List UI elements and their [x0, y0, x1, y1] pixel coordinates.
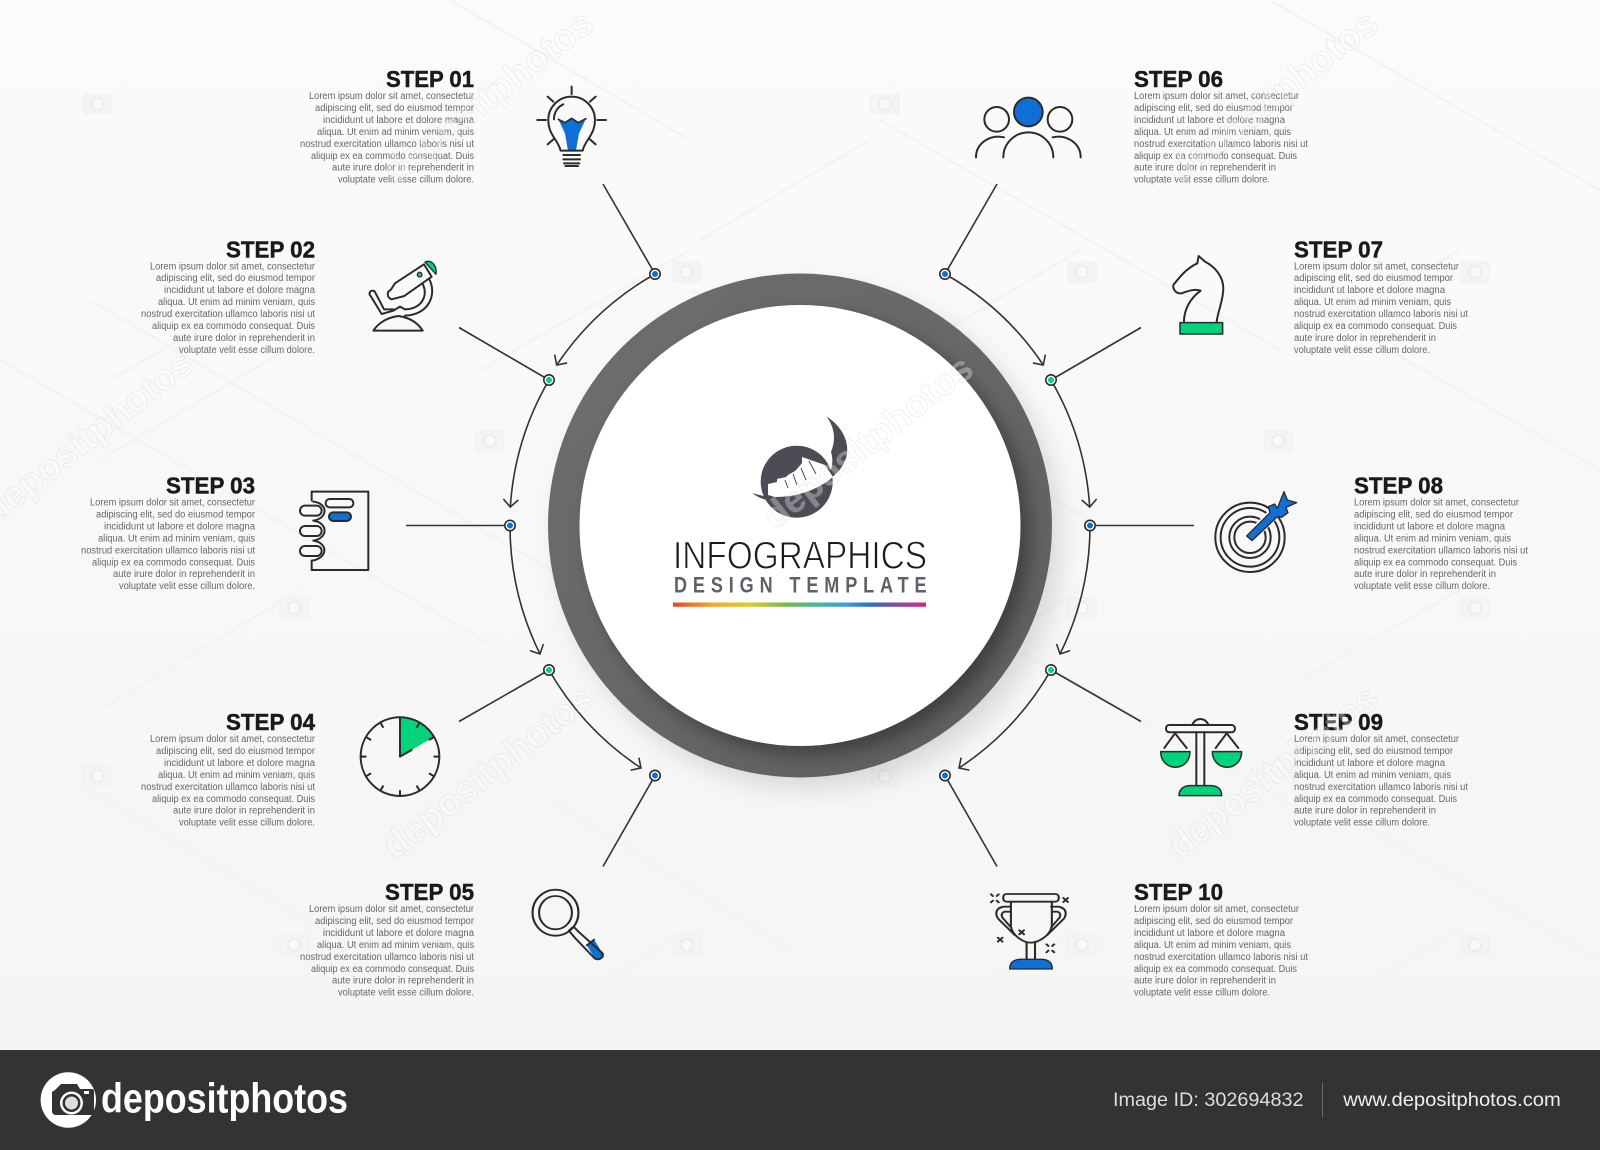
step 05 text: aliqua. Ut enim ad minim veniam, quis — [317, 940, 474, 951]
step 02 text: Lorem ipsum dolor sit amet, consectetur — [150, 261, 316, 272]
step 06 text: Lorem ipsum dolor sit amet, consectetur — [1134, 91, 1300, 102]
step 09 text: aliquip ex ea commodo consequat. Duis — [1294, 794, 1457, 805]
step 08 text: aute irure dolor in reprehenderit in — [1354, 569, 1496, 580]
step 05 text: voluptate velit esse cillum dolore. — [338, 988, 474, 999]
step 06 text: aliqua. Ut enim ad minim veniam, quis — [1134, 127, 1291, 138]
step 09 text: nostrud exercitation ullamco laboris nisi ut — [1294, 782, 1468, 793]
step 09 text: adipiscing elit, sed do eiusmod tempor — [1294, 746, 1454, 757]
step 01 text: aliqua. Ut enim ad minim veniam, quis — [317, 127, 474, 138]
curved arrows — [510, 274, 1090, 768]
step 03 text — [81, 472, 256, 592]
step 07 text: aliqua. Ut enim ad minim veniam, quis — [1294, 297, 1451, 308]
step 04 text: nostrud exercitation ullamco laboris nisi ut — [141, 782, 315, 793]
step 03 text: voluptate velit esse cillum dolore. — [119, 581, 255, 592]
step 10 text: voluptate velit esse cillum dolore. — [1134, 988, 1270, 999]
step 10 text: aute irure dolor in reprehenderit in — [1134, 976, 1276, 987]
watermark text: depositphotos — [1160, 2, 1386, 191]
step 09 text — [1294, 709, 1468, 829]
step 10 text: STEP 10 — [1134, 879, 1223, 905]
step 05 text: aute irure dolor in reprehenderit in — [332, 976, 474, 987]
footer bar — [0, 1050, 1600, 1150]
step 10 text: aliquip ex ea commodo consequat. Duis — [1134, 964, 1297, 975]
step 05 text: Lorem ipsum dolor sit amet, consectetur — [309, 904, 475, 915]
step 09 text: incididunt ut labore et dolore magna — [1294, 758, 1445, 769]
step 01 text: adipiscing elit, sed do eiusmod tempor — [315, 103, 475, 114]
step 01 text: STEP 01 — [386, 66, 474, 92]
step 01 text: incididunt ut labore et dolore magna — [323, 115, 474, 126]
icon: people group — [976, 98, 1081, 157]
watermark text — [0, 2, 1386, 866]
step 04 text: aliquip ex ea commodo consequat. Duis — [152, 794, 315, 805]
step 08 text: incididunt ut labore et dolore magna — [1354, 521, 1505, 532]
step 08 text: aliqua. Ut enim ad minim veniam, quis — [1354, 533, 1511, 544]
step 01 text: nostrud exercitation ullamco laboris nisi ut — [300, 139, 474, 150]
footer url: www.depositphotos.com — [1342, 1089, 1561, 1111]
step 06 text: voluptate velit esse cillum dolore. — [1134, 175, 1270, 186]
step 06 text: STEP 06 — [1134, 66, 1223, 92]
step 03 text: STEP 03 — [166, 472, 255, 498]
step 08 text — [1354, 472, 1528, 592]
step 01 text — [300, 66, 475, 186]
step 05 text — [300, 879, 475, 999]
step 10 text: nostrud exercitation ullamco laboris nisi ut — [1134, 952, 1308, 963]
step 06 text: incididunt ut labore et dolore magna — [1134, 115, 1285, 126]
step 03 text: aute irure dolor in reprehenderit in — [113, 569, 255, 580]
step 06 text: aliquip ex ea commodo consequat. Duis — [1134, 151, 1297, 162]
step 06 text: aute irure dolor in reprehenderit in — [1134, 163, 1276, 174]
step 01 text: aliquip ex ea commodo consequat. Duis — [311, 151, 474, 162]
step 07 text: aliquip ex ea commodo consequat. Duis — [1294, 321, 1457, 332]
watermark text: depositphotos — [755, 347, 981, 536]
step 05 text: incididunt ut labore et dolore magna — [323, 928, 474, 939]
step 04 text: STEP 04 — [226, 709, 315, 735]
step 03 text: aliquip ex ea commodo consequat. Duis — [92, 557, 255, 568]
step 02 text: aliquip ex ea commodo consequat. Duis — [152, 321, 315, 332]
subtitle: design template: DESIGN TEMPLATE — [674, 574, 927, 598]
central ring — [548, 274, 1052, 778]
step 10 text: Lorem ipsum dolor sit amet, consectetur — [1134, 904, 1300, 915]
step 07 text: Lorem ipsum dolor sit amet, consectetur — [1294, 261, 1460, 272]
icon: clock — [361, 717, 439, 796]
step 04 text: aliqua. Ut enim ad minim veniam, quis — [158, 770, 315, 781]
icon: microscope — [369, 261, 436, 331]
step 04 text: aute irure dolor in reprehenderit in — [173, 806, 315, 817]
step 08 text: STEP 08 — [1354, 472, 1443, 498]
step 02 text: adipiscing elit, sed do eiusmod tempor — [156, 273, 316, 284]
step 08 text: adipiscing elit, sed do eiusmod tempor — [1354, 509, 1514, 520]
step 08 text: nostrud exercitation ullamco laboris nisi ut — [1354, 545, 1528, 556]
step 07 text: incididunt ut labore et dolore magna — [1294, 285, 1445, 296]
watermark camera icons — [83, 94, 1489, 955]
step 08 text: aliquip ex ea commodo consequat. Duis — [1354, 557, 1517, 568]
footer divider — [1322, 1083, 1323, 1117]
step 09 text: voluptate velit esse cillum dolore. — [1294, 818, 1430, 829]
step 05 text: STEP 05 — [385, 879, 474, 905]
step 06 text — [1134, 66, 1308, 186]
step 09 text: aliqua. Ut enim ad minim veniam, quis — [1294, 770, 1451, 781]
step 07 text: voluptate velit esse cillum dolore. — [1294, 345, 1430, 356]
icon: notebook — [300, 492, 368, 570]
step 06 text: adipiscing elit, sed do eiusmod tempor — [1134, 103, 1294, 114]
step 06 text: nostrud exercitation ullamco laboris nisi ut — [1134, 139, 1308, 150]
step 01 text: aute irure dolor in reprehenderit in — [332, 163, 474, 174]
step 09 text: Lorem ipsum dolor sit amet, consectetur — [1294, 734, 1460, 745]
step 10 text: adipiscing elit, sed do eiusmod tempor — [1134, 916, 1294, 927]
icon: magnifier — [533, 890, 603, 959]
icon: light bulb — [537, 87, 606, 166]
step 03 text: nostrud exercitation ullamco laboris nisi ut — [81, 545, 255, 556]
step 07 text: aute irure dolor in reprehenderit in — [1294, 333, 1436, 344]
step 04 text: Lorem ipsum dolor sit amet, consectetur — [150, 734, 316, 745]
step 07 text: nostrud exercitation ullamco laboris nisi ut — [1294, 309, 1468, 320]
step 10 text: aliqua. Ut enim ad minim veniam, quis — [1134, 940, 1291, 951]
watermark text: depositphotos — [375, 2, 601, 191]
central white disc — [580, 305, 1020, 746]
step 02 text: STEP 02 — [226, 236, 315, 262]
footer brand name: depositphotos — [101, 1075, 348, 1122]
step 04 text — [141, 709, 316, 829]
step 09 text: aute irure dolor in reprehenderit in — [1294, 806, 1436, 817]
step 03 text: adipiscing elit, sed do eiusmod tempor — [96, 509, 256, 520]
step 08 text: Lorem ipsum dolor sit amet, consectetur — [1354, 498, 1520, 508]
step 03 text: incididunt ut labore et dolore magna — [104, 521, 255, 532]
step 04 text: adipiscing elit, sed do eiusmod tempor — [156, 746, 316, 757]
step 01 text: voluptate velit esse cillum dolore. — [338, 175, 474, 186]
step 02 text: aute irure dolor in reprehenderit in — [173, 333, 315, 344]
step 07 text: STEP 07 — [1294, 236, 1383, 262]
step 05 text: adipiscing elit, sed do eiusmod tempor — [315, 916, 475, 927]
step 07 text: adipiscing elit, sed do eiusmod tempor — [1294, 273, 1454, 284]
logo mark — [752, 416, 847, 518]
icon: balance scales — [1161, 719, 1242, 796]
step 05 text: aliquip ex ea commodo consequat. Duis — [311, 964, 474, 975]
step 01 text: Lorem ipsum dolor sit amet, consectetur — [309, 91, 475, 102]
step 07 text — [1294, 236, 1468, 356]
step 10 text: incididunt ut labore et dolore magna — [1134, 928, 1285, 939]
step 02 text: aliqua. Ut enim ad minim veniam, quis — [158, 297, 315, 308]
step 10 text — [1134, 879, 1308, 999]
icon: target with dart — [1215, 492, 1297, 572]
step 04 text: voluptate velit esse cillum dolore. — [179, 818, 315, 829]
rainbow bar — [673, 602, 926, 607]
step 03 text: Lorem ipsum dolor sit amet, consectetur — [90, 498, 256, 508]
step 02 text: incididunt ut labore et dolore magna — [164, 285, 315, 296]
step 02 text: voluptate velit esse cillum dolore. — [179, 345, 315, 356]
watermark text: depositphotos — [375, 677, 601, 866]
step 03 text: aliqua. Ut enim ad minim veniam, quis — [98, 533, 255, 544]
watermark text: depositphotos — [1160, 677, 1386, 866]
title: infographics: INFOGRAPHICS — [673, 534, 927, 577]
step 02 text — [141, 236, 316, 356]
icon: trophy — [991, 894, 1068, 969]
step 09 text: STEP 09 — [1294, 709, 1383, 735]
footer image id: Image ID: 302694832 — [1113, 1089, 1304, 1111]
timeline dots — [505, 269, 1095, 781]
step 05 text: nostrud exercitation ullamco laboris nisi ut — [300, 952, 474, 963]
step 08 text: voluptate velit esse cillum dolore. — [1354, 581, 1490, 592]
connector lines — [406, 184, 1194, 866]
step 04 text: incididunt ut labore et dolore magna — [164, 758, 315, 769]
icon: chess knight — [1173, 256, 1223, 334]
footer logo icon — [41, 1072, 96, 1128]
step 02 text: nostrud exercitation ullamco laboris nisi ut — [141, 309, 315, 320]
